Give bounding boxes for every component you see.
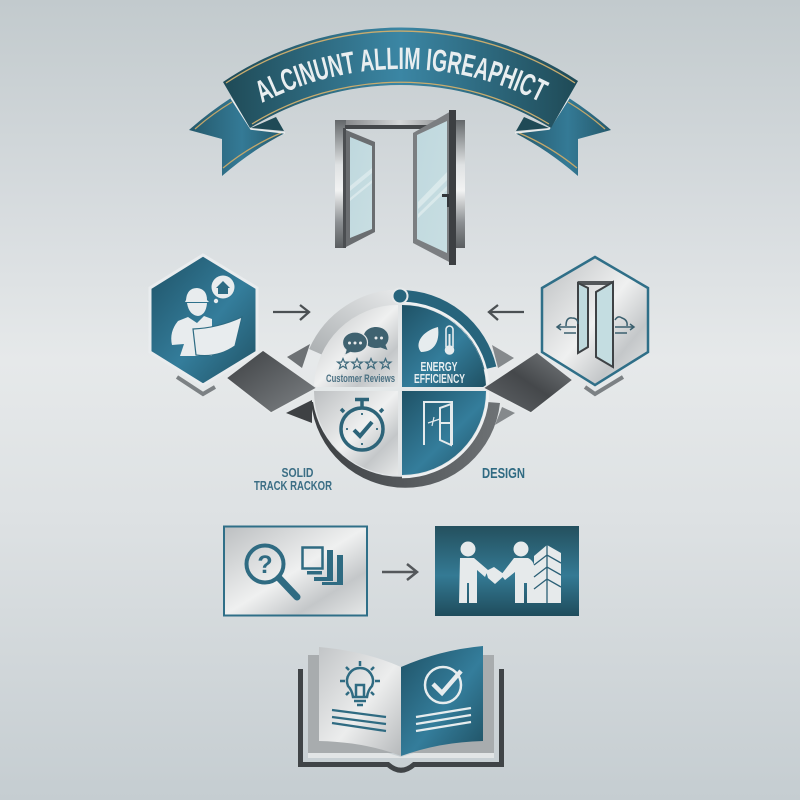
right door leaf (413, 110, 456, 265)
icon: airflow arrows (557, 317, 634, 333)
icon: four stars (338, 358, 391, 368)
ribbon left tail (189, 98, 285, 176)
inner page stack (308, 655, 494, 753)
left hexagon: planner (150, 255, 257, 385)
icon: check circle (425, 667, 461, 703)
label: solid track rackor: TRACK RACKOR (254, 478, 332, 493)
icon: thought bubble house (212, 276, 234, 303)
arrow: research to partnership (382, 564, 417, 580)
icon: thermometer (445, 326, 454, 355)
icon: chat bubbles (342, 327, 388, 355)
quadrant energy (402, 305, 486, 387)
icon: building (534, 545, 561, 603)
energy efficiency label: ENERGY (420, 359, 458, 374)
label: solid track rackor (254, 465, 332, 493)
icon: magnifier with question mark: ? (257, 551, 273, 579)
label: design: DESIGN (482, 465, 525, 482)
icon: document stack (302, 548, 343, 585)
outer ring teal (400, 296, 490, 368)
ribbon right tail (515, 98, 611, 176)
background triangles behind the wheel (286, 344, 515, 425)
icon: leaf (418, 327, 438, 352)
right page (401, 646, 483, 756)
right hexagon: door airflow (542, 257, 648, 385)
icon: stopwatch (341, 400, 383, 450)
title ribbon (189, 28, 611, 176)
quadrant timing (314, 391, 398, 475)
process wheel (311, 288, 500, 488)
title text: ALCINUNT ALLIM IGREAPHICT (257, 48, 550, 103)
customer reviews label: Customer Reviews (326, 373, 395, 385)
connector diamond left (226, 350, 317, 413)
hexagon shape (542, 257, 648, 385)
research box (224, 526, 367, 616)
icon: door outline (424, 402, 452, 445)
partnership box (435, 526, 579, 616)
right page text lines (416, 708, 471, 731)
hexagon shape (150, 255, 257, 385)
energy efficiency label line two: EFFICIENCY (414, 371, 465, 386)
icon: lightbulb (340, 661, 380, 705)
back cover (300, 669, 502, 770)
chevron under right hexagon (585, 377, 623, 394)
quadrant design (402, 391, 486, 475)
top dot (392, 288, 408, 304)
open book (300, 646, 502, 770)
outer ring dark (311, 402, 500, 488)
ribbon gold lines (226, 31, 575, 124)
hero door illustration (335, 110, 465, 265)
door frame (335, 120, 465, 248)
outer ring silver (316, 297, 400, 352)
box panel (224, 526, 367, 616)
icon: two people shaking hands (459, 542, 535, 603)
arrow: left hexagon to wheel (273, 305, 309, 320)
arrow: right hexagon to wheel (489, 305, 524, 320)
ribbon main band (223, 28, 578, 128)
left door leaf (346, 130, 375, 247)
icon: engineer with blueprint (171, 288, 242, 356)
box panel (435, 526, 579, 616)
chevron under left hexagon (177, 377, 215, 394)
label: solid track rackor: SOLID (282, 465, 314, 480)
left page text lines (332, 710, 386, 731)
icon: door (578, 281, 613, 367)
left page (319, 647, 401, 756)
connector diamond right (483, 352, 573, 413)
icon: magnifier with question mark (246, 546, 297, 597)
quadrant reviews (314, 305, 398, 387)
